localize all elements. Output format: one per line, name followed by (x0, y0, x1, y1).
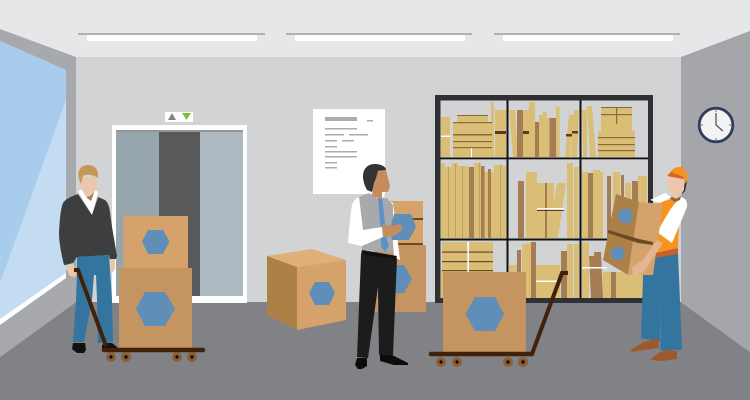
collar (369, 189, 385, 199)
head (372, 170, 390, 199)
wheels (436, 357, 528, 367)
hat brim (667, 172, 684, 179)
vest (359, 193, 393, 253)
ceiling (0, 0, 750, 60)
box (443, 272, 526, 352)
elevator (112, 125, 247, 303)
tie (378, 197, 389, 252)
pallet cart left (74, 216, 203, 362)
belt (655, 248, 678, 258)
hexagon (466, 297, 504, 331)
trousers (357, 255, 397, 358)
floor (0, 302, 750, 400)
pallet cart right (431, 272, 568, 367)
shoes (72, 343, 117, 353)
shirt and neck (78, 189, 98, 215)
hair back (682, 180, 687, 194)
forearm and hand (632, 240, 663, 277)
books: top shelf (441, 102, 635, 157)
hair (78, 165, 98, 184)
hair (363, 164, 386, 192)
upper arm (657, 197, 687, 243)
boxes with hexagons (119, 216, 192, 348)
jacket cuff (64, 261, 73, 265)
books: bottom shelf (441, 242, 643, 298)
worker carrying box (603, 167, 687, 361)
bookshelf (435, 95, 653, 303)
right wall (681, 31, 750, 352)
shelf frame (435, 95, 653, 303)
elevator indicator (165, 112, 193, 122)
jeans (641, 253, 682, 350)
near leg gap (660, 298, 661, 350)
floor cube box (267, 249, 346, 330)
sleeve (348, 197, 383, 246)
wall clock (699, 108, 733, 142)
handle and platform (431, 273, 568, 354)
man with jacket (59, 165, 117, 353)
left wall (0, 29, 76, 357)
poster (313, 109, 385, 194)
shirt back (375, 193, 400, 260)
window (0, 41, 66, 325)
far shoulder (650, 193, 672, 203)
hexagon held (390, 214, 416, 240)
shoes (355, 355, 408, 369)
back wall (76, 57, 682, 303)
box (603, 194, 663, 275)
wheels (106, 352, 197, 362)
orange vest (655, 197, 680, 253)
ceiling lights (78, 33, 680, 41)
shelf frame backing (440, 100, 648, 298)
jeans (73, 255, 113, 343)
hands (66, 259, 115, 277)
belt (361, 250, 397, 259)
man with tie (348, 164, 416, 369)
head (668, 176, 685, 197)
shoes (631, 338, 677, 361)
handle and platform (74, 270, 203, 350)
hand (382, 224, 402, 237)
jacket (59, 194, 117, 265)
head (81, 176, 97, 197)
hard hat (670, 167, 687, 184)
boxes behind man (374, 201, 426, 312)
collar (666, 195, 681, 202)
books: middle shelf (441, 163, 647, 239)
